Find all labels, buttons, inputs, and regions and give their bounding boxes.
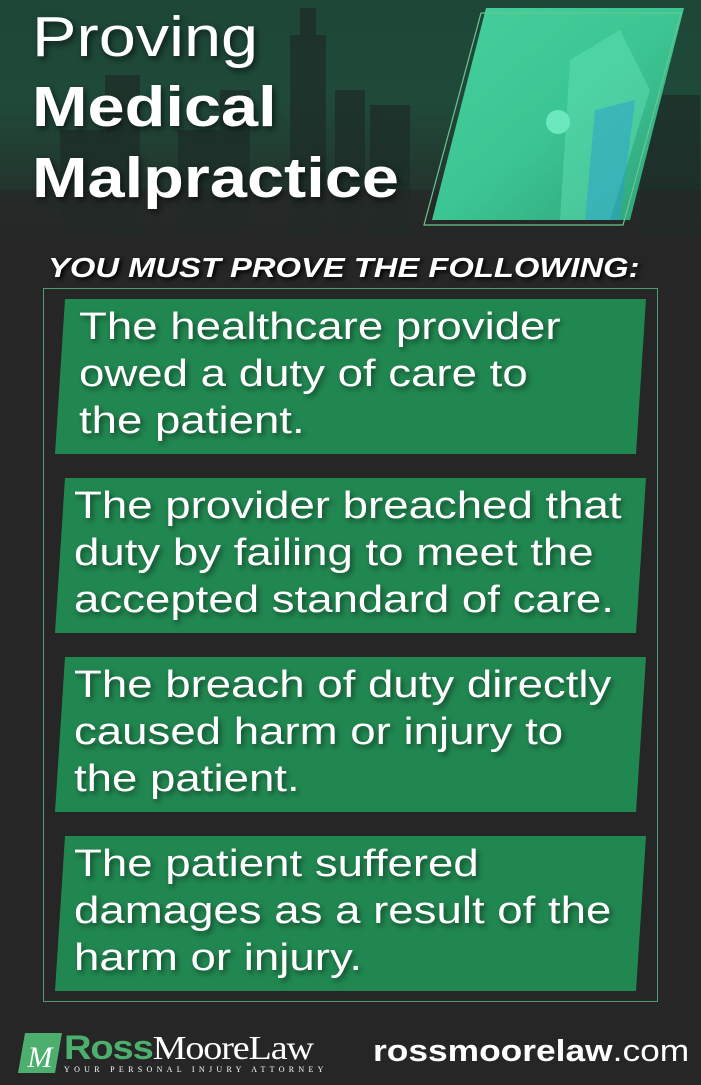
title	[32, 5, 400, 213]
item 2: The provider breached that	[74, 485, 622, 527]
item 3: The breach of duty directly	[74, 664, 611, 706]
logo	[18, 1029, 328, 1074]
item 3: caused harm or injury to	[74, 711, 563, 753]
item 2: accepted standard of care.	[74, 579, 614, 621]
item 1: the patient.	[79, 400, 305, 442]
item 3: the patient.	[74, 758, 300, 800]
title: Medical	[32, 75, 277, 139]
item 1: The healthcare provider	[79, 306, 561, 348]
logo: RossMooreLaw	[64, 1029, 313, 1067]
logo: YOUR PERSONAL INJURY ATTORNEY	[64, 1065, 328, 1074]
item 4	[55, 836, 646, 991]
panel: list frame	[43, 288, 658, 1002]
item 4: The patient suffered	[74, 843, 479, 885]
item 4: damages as a result of the	[74, 890, 611, 932]
item 3	[55, 657, 646, 812]
background skyline	[0, 0, 701, 190]
icon: M logo	[18, 1033, 62, 1073]
item 2: duty by failing to meet the	[74, 532, 594, 574]
heading: you must prove: YOU MUST PROVE THE FOLLOWING:	[48, 252, 639, 283]
title: Malpractice	[32, 146, 399, 210]
item 4: harm or injury.	[74, 937, 362, 979]
website url: rossmoorelaw.com	[373, 1033, 689, 1068]
item 1: owed a duty of care to	[79, 353, 528, 395]
title: Proving	[32, 5, 258, 69]
item 1	[55, 299, 646, 454]
item 2	[55, 478, 646, 633]
photo: doctor	[423, 8, 684, 226]
